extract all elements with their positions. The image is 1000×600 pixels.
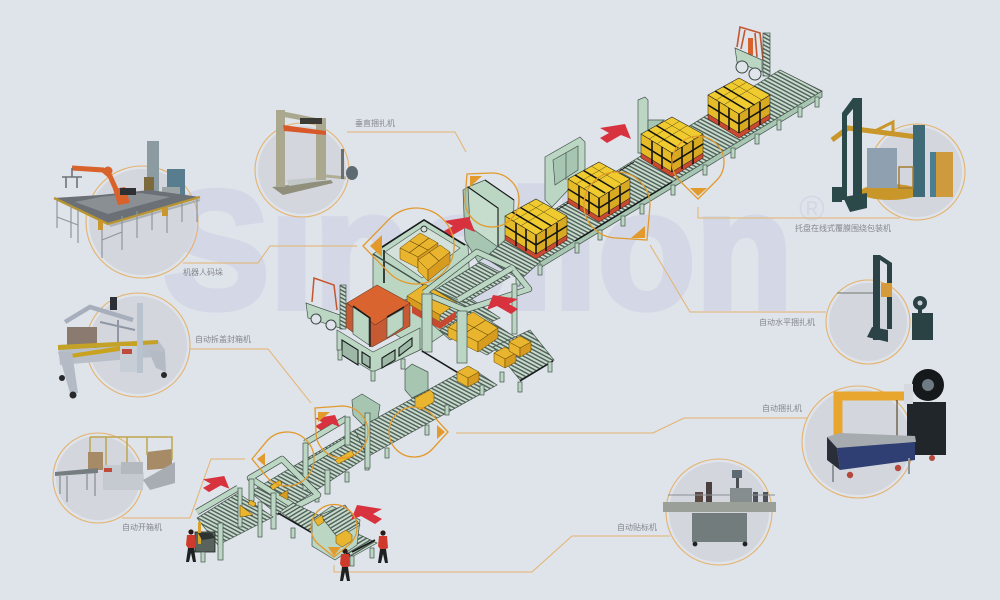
callout marker: palletizer xyxy=(363,208,454,284)
panel: automatic strapping machine photo xyxy=(802,369,946,498)
wrap station panel xyxy=(463,180,514,262)
straight frame behind third pallet xyxy=(638,97,664,153)
pallet stacker xyxy=(337,285,420,381)
robot cell column xyxy=(144,141,185,197)
watermark logo: Sinolion xyxy=(163,156,793,344)
label: robot palletizer: 机器人码垛 xyxy=(183,267,223,277)
conveyor: top pallet line xyxy=(505,70,822,268)
robot conveyor platform xyxy=(54,190,200,258)
label: labeler: 自动贴标机 xyxy=(617,522,657,532)
panel: horizontal strapping machine photo xyxy=(826,255,933,364)
wrapping machine xyxy=(832,98,953,212)
box erector station with worker machine xyxy=(195,522,215,562)
label: case sealer: 自动拆盖封箱机 xyxy=(195,334,251,344)
frame: flap folder xyxy=(249,459,318,529)
red flow arrows xyxy=(203,124,631,524)
panel: labeling machine photo xyxy=(663,459,776,565)
palletizer upper housing xyxy=(373,220,470,350)
horizontal strapper xyxy=(837,255,933,342)
frame: box closer xyxy=(303,413,370,494)
label: horizontal strapper: 自动水平捆扎机 xyxy=(759,317,815,327)
conveyor: side branch xyxy=(278,503,377,566)
strapper xyxy=(827,369,946,482)
erector machine xyxy=(55,437,175,502)
small box groups xyxy=(415,336,531,410)
boxes on palletizer xyxy=(400,233,450,281)
forklift: left xyxy=(306,278,346,330)
callout marker: case sealer xyxy=(315,406,368,458)
control panel on lower line xyxy=(352,364,428,425)
panel: case erector photo xyxy=(53,433,175,523)
strapping frame xyxy=(272,110,358,195)
panel: pallet wrapper photo xyxy=(832,98,965,220)
robot arm xyxy=(62,166,136,205)
case packer on side branch xyxy=(312,505,360,560)
callout marker: case erector xyxy=(252,432,314,486)
callout marker: horizontal strapper xyxy=(584,172,650,240)
conveyor: lower left unit xyxy=(197,488,273,560)
label: case erector: 自动开箱机 xyxy=(122,522,162,532)
callout marker: labeler xyxy=(311,505,357,557)
panel: vertical strapping machine photo xyxy=(255,110,358,217)
pallet stack 4 xyxy=(708,78,770,138)
panel: case sealer photo xyxy=(58,293,190,398)
arch frame behind second pallet xyxy=(545,137,585,207)
label: strapping machine: 自动捆扎机 xyxy=(762,403,802,413)
callout marker: strapping machine xyxy=(389,407,448,457)
pallet stack 2 xyxy=(568,162,630,222)
palletizer middle conveyor with boxes xyxy=(405,284,500,340)
labeler xyxy=(663,470,776,546)
leader lines xyxy=(122,132,900,572)
label: vertical strapper: 垂直捆扎机 xyxy=(355,118,395,128)
forklift: top right xyxy=(735,27,770,80)
workers xyxy=(186,529,388,581)
panel: robot palletizer photo xyxy=(54,141,200,278)
conveyor: main lower line xyxy=(250,367,497,515)
pallet stack 3 xyxy=(641,117,703,177)
callout marker: vertical strapper xyxy=(465,173,519,227)
gantry frame xyxy=(422,252,529,380)
callout marker: pallet wrapper xyxy=(672,136,724,199)
connecting conveyor xyxy=(485,240,542,286)
label: pallet wrapper: 托盘在线式覆膜围绕包装机 xyxy=(795,223,891,233)
sealer body xyxy=(58,297,167,398)
pallet stack 1 xyxy=(505,199,567,259)
watermark logo: ® xyxy=(799,189,825,228)
gantry lower conveyor and boxes xyxy=(440,310,554,392)
